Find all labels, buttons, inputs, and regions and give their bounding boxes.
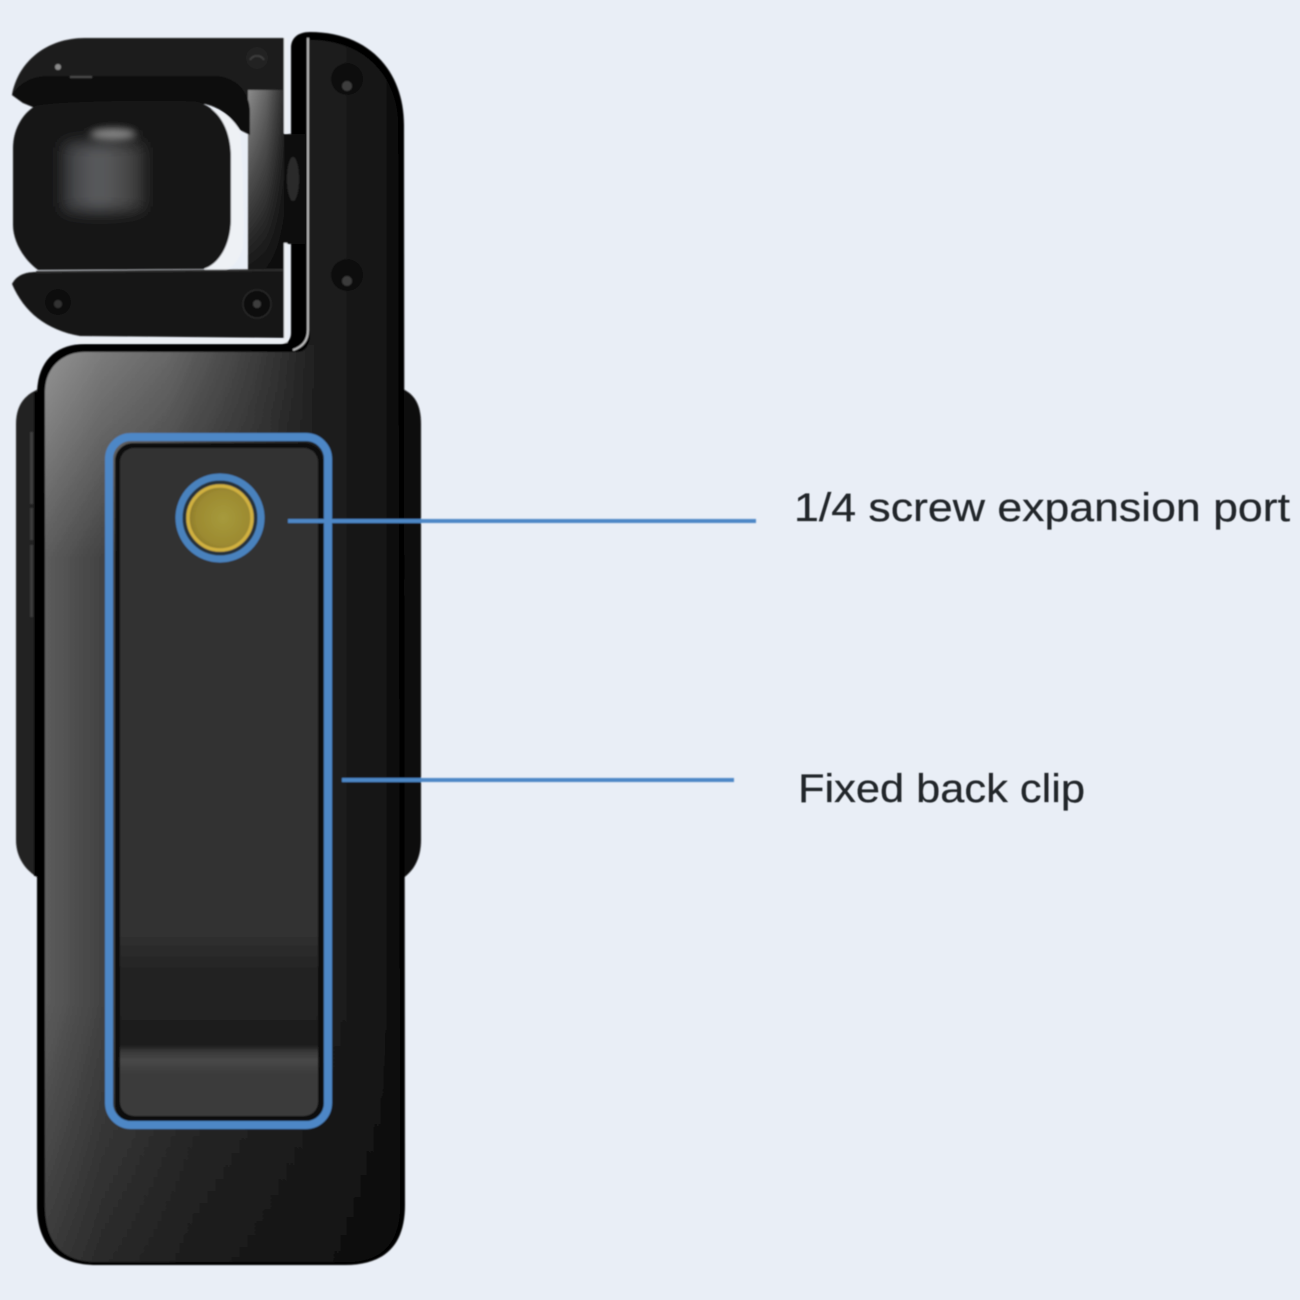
lower bracket bbox=[12, 270, 284, 338]
camera lens ball bbox=[13, 101, 231, 270]
leader line: back clip bbox=[342, 778, 734, 782]
left side buttons panel bbox=[16, 388, 42, 880]
hinge bbox=[283, 134, 305, 244]
label: back clip: Fixed back clip bbox=[798, 767, 1085, 811]
label: screw port: 1/4 screw expansion port bbox=[794, 486, 1290, 530]
main body outline bbox=[37, 32, 405, 1265]
white window behind lens bbox=[205, 108, 243, 270]
silver inner band bbox=[248, 90, 284, 274]
camera head top bracket bbox=[12, 38, 284, 274]
top bolts bbox=[55, 64, 61, 70]
screw port bbox=[179, 477, 261, 559]
body surface bbox=[40, 30, 405, 1265]
right side panel bbox=[400, 388, 421, 880]
arm highlight edge bbox=[293, 38, 308, 350]
top arch lip bbox=[12, 76, 250, 135]
device back view bbox=[12, 30, 756, 1265]
back clip plate bbox=[115, 443, 323, 1123]
leader line: screw port bbox=[288, 519, 756, 523]
white gap line around head bbox=[76, 38, 286, 341]
screw holes on arm bbox=[331, 63, 363, 291]
callout outline: back clip bbox=[109, 437, 328, 1125]
